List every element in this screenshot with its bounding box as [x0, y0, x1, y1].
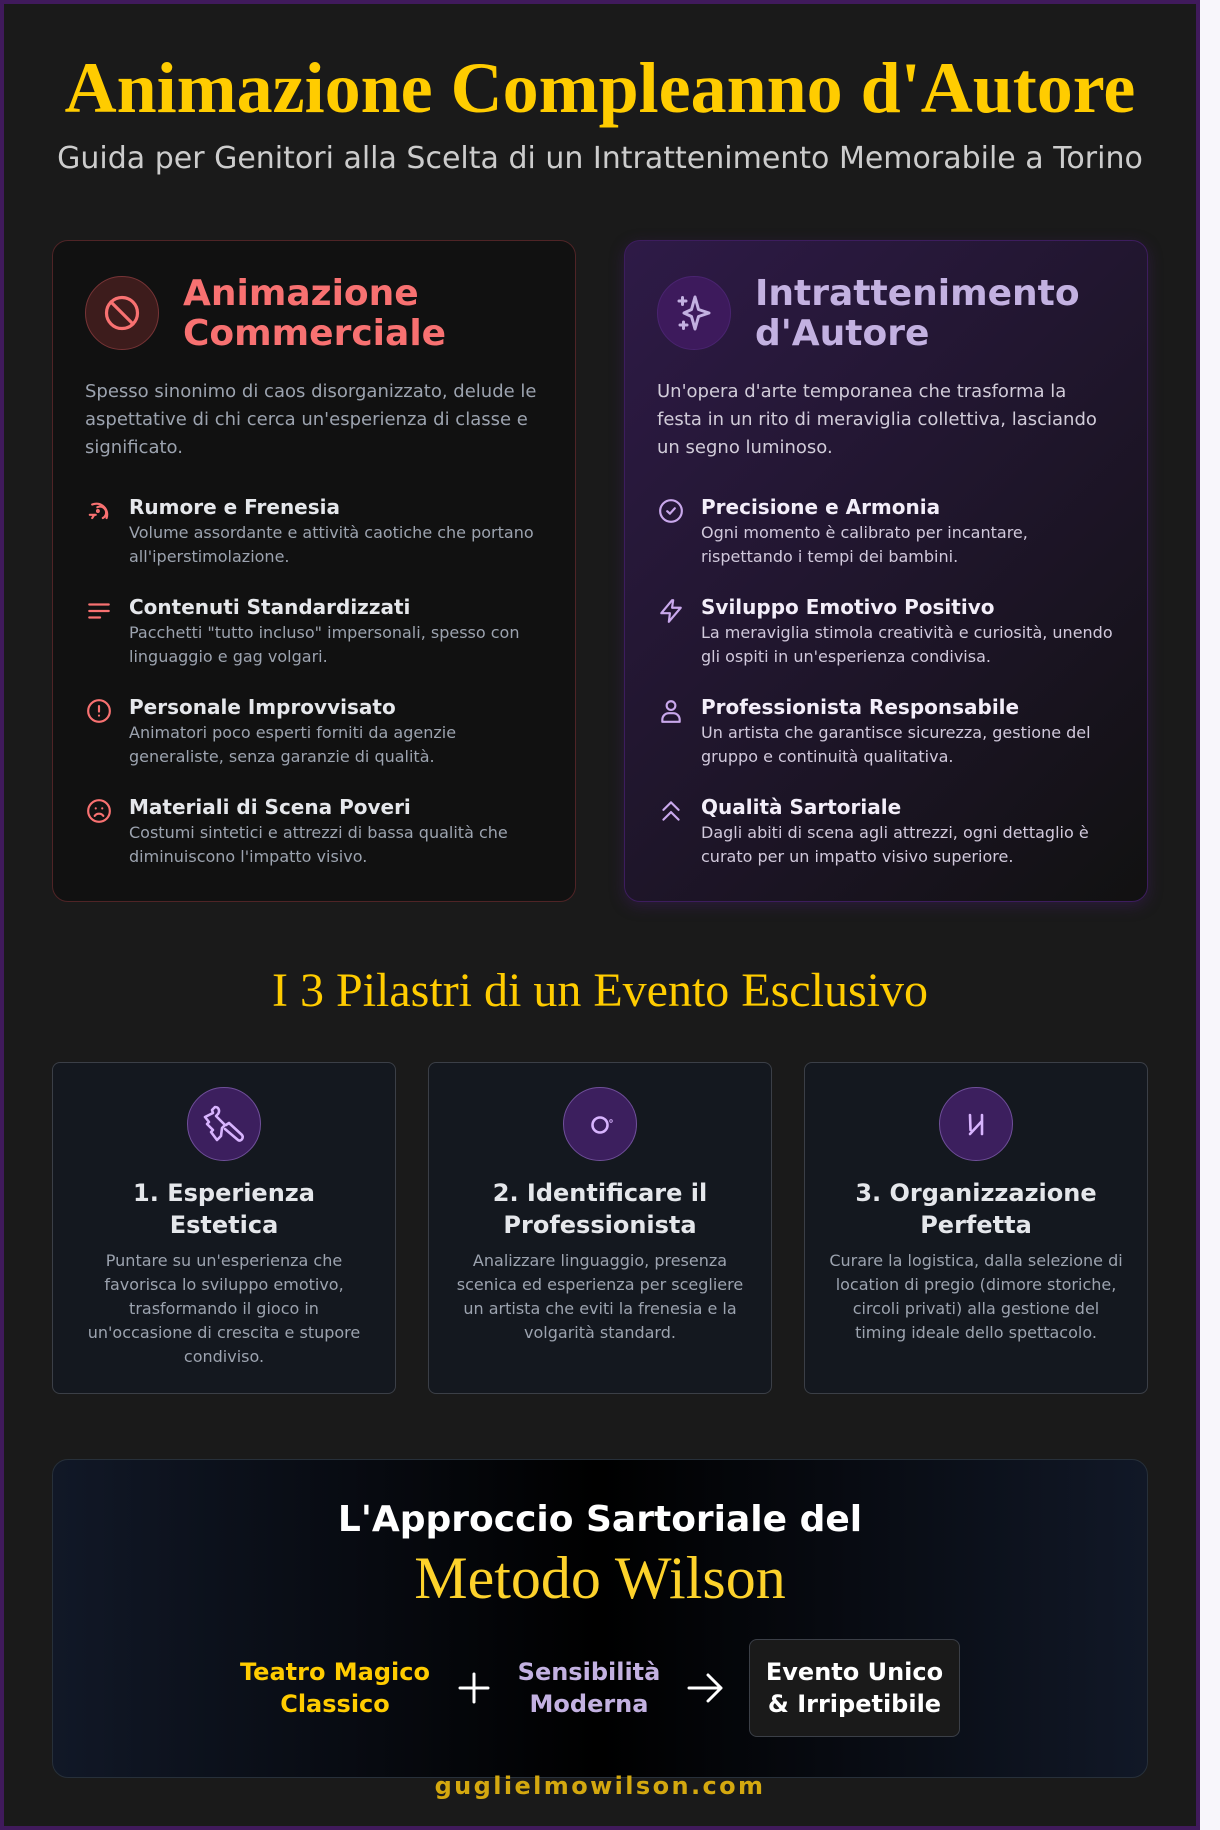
pillar text: [829, 1251, 1123, 1342]
result box: [749, 1639, 960, 1737]
item text: [129, 723, 456, 766]
item title: Rumore e Frenesia: [129, 495, 340, 519]
pillar text: [88, 1251, 360, 1366]
panel: intrattenimento d'autore: [624, 240, 1148, 902]
heading: L'Approccio Sartoriale del: [338, 1499, 862, 1540]
item text: Un artista che garantisce sicurezza, gestione del: [701, 723, 1091, 742]
subtitle: Guida per Genitori alla Scelta di un Intrattenimento Memorabile a Torino: [57, 141, 1143, 176]
item title: Qualità Sartoriale: [701, 795, 901, 819]
pillar title: [855, 1179, 1097, 1239]
pillar title: Estetica: [170, 1211, 278, 1239]
icon: tool: [187, 1087, 261, 1161]
icon: timing mark: [939, 1087, 1013, 1161]
item title: Personale Improvvisato: [129, 695, 396, 719]
heading: [183, 273, 446, 354]
item text: gruppo e continuità qualitativa.: [701, 747, 953, 766]
panel: pillar 1: [52, 1062, 396, 1394]
intro text: [657, 381, 1097, 458]
item text: [129, 823, 508, 866]
item title: Contenuti Standardizzati: [129, 595, 410, 619]
item text: [701, 723, 1091, 766]
icon: alert: [87, 699, 111, 723]
pillar text: favorisca lo sviluppo emotivo,: [104, 1275, 344, 1294]
icon: chevrons up: [662, 801, 680, 821]
label: sensibilita moderna: Moderna: [530, 1690, 648, 1718]
pillar title: Professionista: [503, 1211, 697, 1239]
icon: plus: [458, 1672, 490, 1704]
item text: Volume assordante e attività caotiche che portano: [129, 523, 534, 542]
pillar title: [493, 1179, 707, 1239]
pillar text: condiviso.: [184, 1347, 264, 1366]
heading: Animazione: [183, 273, 419, 314]
heading: Intrattenimento: [755, 273, 1080, 314]
result box: Evento Unico: [766, 1658, 943, 1686]
pillar title: [133, 1179, 315, 1239]
item text: [701, 623, 1113, 666]
pillar text: trasformando il gioco in: [129, 1299, 319, 1318]
intro text: un segno luminoso.: [657, 437, 833, 458]
icon: ban: [85, 276, 159, 350]
item text: all'iperstimolazione.: [129, 547, 290, 566]
icon: sad face: [87, 799, 111, 823]
intro text: significato.: [85, 437, 183, 458]
item text: La meraviglia stimola creatività e curiosità, unendo: [701, 623, 1113, 642]
item text: [701, 823, 1089, 866]
item text: diminuiscono l'impatto visivo.: [129, 847, 367, 866]
pillar text: timing ideale dello spettacolo.: [855, 1323, 1097, 1342]
item text: curato per un impatto visivo superiore.: [701, 847, 1013, 866]
heading: d'Autore: [755, 313, 929, 354]
label: teatro magico: Teatro Magico: [240, 1658, 430, 1686]
pillar text: Curare la logistica, dalla selezione di: [829, 1251, 1123, 1270]
item text: [701, 523, 1028, 566]
item text: Dagli abiti di scena agli attrezzi, ogni dettaglio è: [701, 823, 1089, 842]
item text: Pacchetti "tutto incluso" impersonali, spesso con: [129, 623, 519, 642]
heading: [755, 273, 1080, 354]
item title: Precisione e Armonia: [701, 495, 940, 519]
icon: sparkles: [657, 276, 731, 350]
panel: pillar 2: [428, 1062, 772, 1394]
item title: Materiali di Scena Poveri: [129, 795, 411, 819]
title: Animazione Compleanno d'Autore: [65, 48, 1135, 128]
footer url: guglielmowilson.com: [435, 1772, 765, 1800]
item title: Sviluppo Emotivo Positivo: [701, 595, 994, 619]
icon: noise: [88, 502, 108, 520]
intro text: Spesso sinonimo di caos disorganizzato, delude le: [85, 381, 536, 402]
label: teatro magico: [240, 1658, 430, 1718]
item text: [129, 523, 534, 566]
result box: & Irripetibile: [768, 1690, 941, 1718]
intro text: [85, 381, 536, 458]
item text: rispettando i tempi dei bambini.: [701, 547, 958, 566]
panel: metodo wilson: [52, 1459, 1148, 1778]
pillar title: 2. Identificare il: [493, 1179, 707, 1207]
section heading: I 3 Pilastri di un Evento Esclusivo: [272, 964, 928, 1017]
intro text: aspettative di chi cerca un'esperienza di classe e: [85, 409, 528, 430]
item text: generaliste, senza garanzie di qualità.: [129, 747, 435, 766]
pillar text: location di pregio (dimore storiche,: [836, 1275, 1116, 1294]
label: sensibilita moderna: [518, 1658, 660, 1718]
intro text: festa in un rito di meraviglia collettiva, lasciando: [657, 409, 1097, 430]
pillar text: scenica ed esperienza per scegliere: [457, 1275, 743, 1294]
pillar title: Perfetta: [920, 1211, 1032, 1239]
icon: person: [661, 700, 681, 723]
pillar text: circoli privati) alla gestione del: [853, 1299, 1099, 1318]
panel: animazione commerciale: [52, 240, 576, 902]
panel: pillar 3: [804, 1062, 1148, 1394]
label: sensibilita moderna: Sensibilità: [518, 1658, 660, 1686]
pillar title: 3. Organizzazione: [855, 1179, 1097, 1207]
item text: Ogni momento è calibrato per incantare,: [701, 523, 1028, 542]
heading: Commerciale: [183, 313, 446, 354]
icon: ring: [563, 1087, 637, 1161]
pillar text: un artista che eviti la frenesia e la: [463, 1299, 737, 1318]
icon: check circle: [659, 499, 683, 523]
item text: gli ospiti in un'esperienza condivisa.: [701, 647, 991, 666]
item text: [129, 623, 519, 666]
pillar text: volgarità standard.: [524, 1323, 676, 1342]
icon: lines: [88, 603, 110, 619]
label: teatro magico: Classico: [280, 1690, 390, 1718]
pillar title: 1. Esperienza: [133, 1179, 315, 1207]
item text: Animatori poco esperti forniti da agenzie: [129, 723, 456, 742]
pillar text: [457, 1251, 743, 1342]
pillar text: Analizzare linguaggio, presenza: [473, 1251, 727, 1270]
intro text: Un'opera d'arte temporanea che trasforma la: [657, 381, 1066, 402]
item text: Costumi sintetici e attrezzi di bassa qualità che: [129, 823, 508, 842]
item title: Professionista Responsabile: [701, 695, 1019, 719]
item text: linguaggio e gag volgari.: [129, 647, 328, 666]
method name: Metodo Wilson: [414, 1545, 786, 1611]
pillar text: un'occasione di crescita e stupore: [88, 1323, 360, 1342]
icon: arrow: [688, 1673, 723, 1703]
pillar text: Puntare su un'esperienza che: [106, 1251, 342, 1270]
icon: bolt: [660, 599, 682, 623]
